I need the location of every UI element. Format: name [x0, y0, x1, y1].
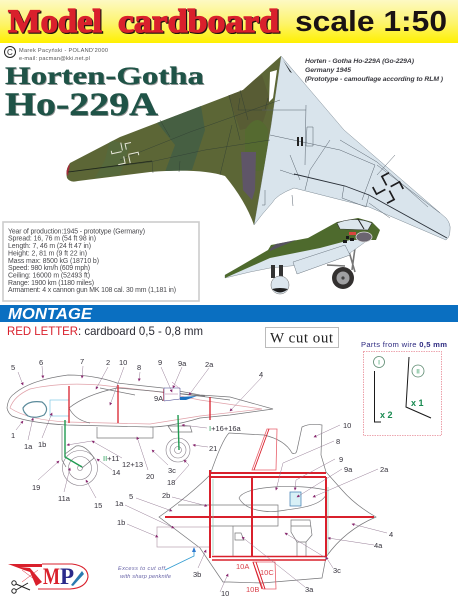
montage band: MONTAGE [8, 306, 93, 323]
fuselage outline [7, 375, 273, 427]
part number labels: 2a [380, 465, 389, 474]
green wire [65, 415, 179, 467]
part number labels: 11a [58, 494, 71, 503]
logo [8, 564, 88, 593]
header title: Model cardboard: cardboard [118, 4, 279, 40]
aircraft description [305, 58, 444, 83]
specification box: Ceiling: 16000 m (52493 ft) [8, 272, 90, 280]
white strip at wing root [269, 70, 277, 102]
aircraft title: Ho-229A [6, 88, 159, 124]
leader lines [16, 366, 387, 592]
part number labels: 1b [38, 440, 46, 449]
cockpit rect [290, 492, 301, 506]
part number labels: 7 [80, 357, 84, 366]
part number labels: 3c [333, 566, 341, 575]
specification box: Year of production:1945 - prototype (Germany) [8, 228, 145, 236]
part number labels: 1 [11, 431, 15, 440]
specification box: Height: 2, 81 m (9 ft 22 in) [8, 250, 87, 258]
red cut bars [69, 385, 210, 423]
header title: Model cardboard: Model [9, 5, 103, 41]
part number labels: 1b [117, 518, 125, 527]
specification box: Length: 7, 46 m (24 ft 47 in) [8, 243, 91, 250]
green upper fuselage [225, 218, 380, 278]
wire I: x 2 [380, 410, 393, 420]
camouflage patches [66, 75, 270, 200]
aircraft title: Ho-229A [5, 87, 158, 123]
part number labels: 15 [94, 501, 102, 510]
excess note: Excess to cut off [118, 566, 166, 572]
top view aircraft [66, 56, 450, 240]
light underside half [254, 56, 450, 240]
cockpit [164, 382, 197, 401]
logo: P [60, 564, 74, 589]
part number labels: 12+13 [122, 460, 143, 469]
part number labels: 10C [260, 568, 274, 577]
scissors [12, 581, 30, 593]
panel lines: right [262, 105, 440, 213]
nose intake [356, 232, 372, 242]
part number labels: 4 [389, 530, 393, 539]
part number labels: 10 [119, 358, 127, 367]
part number labels: 4a [374, 541, 383, 550]
aircraft title: Horten-Gotha [5, 63, 205, 90]
copyright block: e-mail: pacman@kki.net.pl [19, 56, 90, 62]
canopy [337, 220, 372, 230]
rear gear [271, 265, 289, 294]
red frame [165, 470, 374, 558]
copyright block [4, 46, 108, 62]
part number labels: 14 [112, 468, 120, 477]
wire I: I [378, 360, 380, 366]
part number labels [11, 357, 393, 598]
header title: Model cardboard: cardboard [119, 5, 280, 41]
aircraft description: Horten - Gotha Ho-229A (Go-229A) [305, 58, 415, 65]
part number labels: 3b [193, 570, 201, 579]
main wheel [62, 450, 98, 486]
side view aircraft [225, 218, 380, 294]
header title: Model cardboard: Model [8, 4, 102, 40]
specification box: Speed: 980 km/h (609 mph) [8, 265, 90, 272]
landing gear struts [327, 248, 355, 272]
part number labels: 10B [246, 585, 259, 594]
part number labels: 10A [236, 562, 249, 571]
part number labels: 9A [154, 394, 163, 403]
inner rectangles [178, 505, 278, 526]
wire II: II [416, 368, 420, 376]
fuselage ellipse [239, 486, 326, 512]
part number labels: 2b [162, 491, 170, 500]
excess note [118, 547, 196, 580]
nose wheel [166, 426, 192, 462]
rudder fin [252, 429, 277, 470]
part number labels: 9a [178, 359, 187, 368]
part number labels: 5 [11, 363, 15, 372]
montage band [0, 305, 458, 323]
right black cross [370, 170, 406, 206]
undercarriage pod [62, 426, 153, 467]
plan outline [159, 424, 376, 583]
header title: Model cardboard [8, 4, 280, 41]
wire I [374, 356, 393, 422]
header band [0, 0, 458, 43]
part number labels: I+16+16a [209, 424, 242, 433]
part number labels: 21 [209, 444, 217, 453]
intake [23, 402, 47, 417]
part number labels: 5 [129, 492, 133, 501]
specification box: Spread: 16, 76 m (54 ft 98 in) [8, 236, 96, 243]
wire parts [361, 340, 447, 436]
part number labels: 9a [344, 465, 353, 474]
part number labels: 1a [24, 442, 33, 451]
excess note: with sharp penknife [120, 574, 171, 580]
aircraft title: Horten-Gotha [6, 64, 206, 91]
inner teardrop [69, 388, 230, 423]
part number labels: 10 [343, 421, 351, 430]
wire parts: Parts from wire 0,5 mm [361, 340, 447, 349]
part number labels: 1a [115, 499, 124, 508]
specification box: Armament: 4 x cannon gun MK 108 cal. 30 mm (1,181 in) [8, 287, 176, 294]
part number labels: II+11 [103, 454, 119, 463]
specification box: Range: 1900 km (1180 miles) [8, 280, 94, 287]
seat shape [233, 520, 312, 556]
wire II: x 1 [411, 398, 424, 408]
panel lines: wing [70, 90, 280, 175]
logo: M [43, 564, 60, 589]
part number labels: 3a [305, 585, 314, 594]
copyright block: Marek Pacyński - POLAND'2000 [19, 48, 108, 54]
part number labels: 9 [158, 358, 162, 367]
W cut out box [266, 328, 338, 348]
part number labels: 2a [205, 360, 214, 369]
header scale: scale 1:50 [295, 6, 447, 38]
wire II [406, 357, 431, 418]
W cut out box: W cut out [270, 330, 334, 346]
camouflaged upper half [66, 56, 281, 225]
aircraft title [5, 63, 206, 124]
aircraft description: (Prototype - camouflage according to RLM ) [305, 76, 444, 83]
part number labels: 10 [221, 589, 229, 598]
light lower fuselage [225, 238, 368, 278]
part number labels: 8 [137, 363, 141, 372]
material note: RED LETTER: cardboard 0,5 - 0,8 mm [7, 324, 203, 338]
part number labels: 9 [339, 455, 343, 464]
part number labels: 18 [167, 478, 175, 487]
part number labels: 4 [259, 370, 263, 379]
arrow [165, 550, 194, 570]
aircraft description: Germany 1945 [305, 67, 351, 74]
part 10 flaps [253, 562, 276, 589]
specification box [3, 222, 199, 301]
main wheel [332, 267, 354, 289]
part number labels: 6 [39, 358, 43, 367]
part number labels: 3c [168, 466, 176, 475]
copyright block: C [7, 48, 13, 57]
left white cross [110, 140, 140, 166]
specification box: Mass max: 8500 kG (18710 b) [8, 258, 99, 265]
part number labels: 2 [106, 358, 110, 367]
side assembly drawing [7, 375, 273, 486]
part number labels: 20 [146, 472, 154, 481]
part number labels: 19 [32, 483, 40, 492]
top assembly drawing [157, 424, 376, 589]
part number labels: 8 [336, 437, 340, 446]
